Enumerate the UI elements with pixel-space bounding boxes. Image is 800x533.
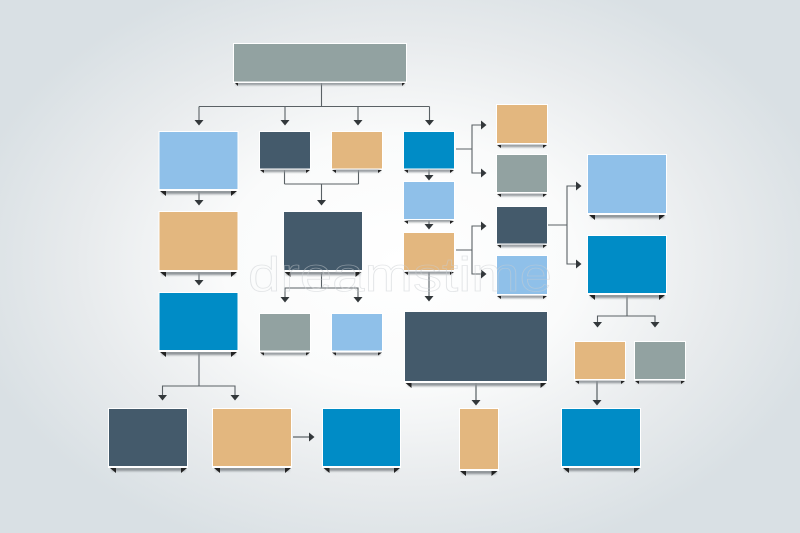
box: tan lower right [574, 341, 626, 384]
connector: tan to large dark box [424, 272, 434, 302]
box: dark bottom left [108, 408, 188, 473]
connector: two boxes merge into dark box [284, 170, 358, 206]
box: blue left [158, 292, 238, 357]
connector: light blue to tan [424, 221, 434, 230]
box: light blue centre small [331, 313, 383, 356]
box: dark small top [259, 131, 311, 173]
box: top grey [233, 43, 407, 86]
box: light blue left [158, 131, 238, 196]
connector: left column arrow 2 [194, 272, 204, 286]
box: tan bottom [212, 408, 292, 473]
box: blue small top [403, 131, 455, 173]
connector: left column split [158, 352, 240, 400]
box: large dark wide [404, 311, 548, 388]
connector: dark split to right column [548, 182, 582, 268]
box: tan small top [331, 131, 383, 173]
connector: tan split to dark and light blue [456, 222, 486, 278]
box: tan left [158, 211, 238, 277]
box: dark centre [283, 211, 363, 277]
box: light blue far right [587, 154, 667, 220]
connector: right blue split [593, 295, 660, 328]
box: blue bottom right [561, 408, 641, 473]
box: dark right column [496, 206, 548, 248]
connector: blue to light blue [424, 169, 434, 180]
connector: blue split to tan and grey [456, 120, 486, 178]
connector: top box to four children [194, 82, 434, 126]
box: tan centre [403, 232, 455, 275]
box: grey right column [496, 154, 548, 197]
connector: centre dark box split [280, 272, 362, 302]
box: narrow tan bottom [459, 408, 499, 476]
connector: horizontal arrow bottom row [293, 432, 314, 442]
box: light blue right column [496, 255, 548, 299]
box: grey centre small [259, 313, 311, 356]
connector: large dark box to narrow tan [472, 383, 480, 406]
box: blue bottom [322, 408, 401, 473]
box: blue far right [587, 235, 667, 300]
watermark: dreamstime [248, 249, 552, 302]
box: light blue centre [403, 181, 455, 224]
box: grey lower right [634, 341, 686, 384]
connector: left column arrow 1 [194, 191, 204, 206]
connector: right tan to blue [592, 381, 602, 406]
box: tan right column [496, 104, 548, 148]
